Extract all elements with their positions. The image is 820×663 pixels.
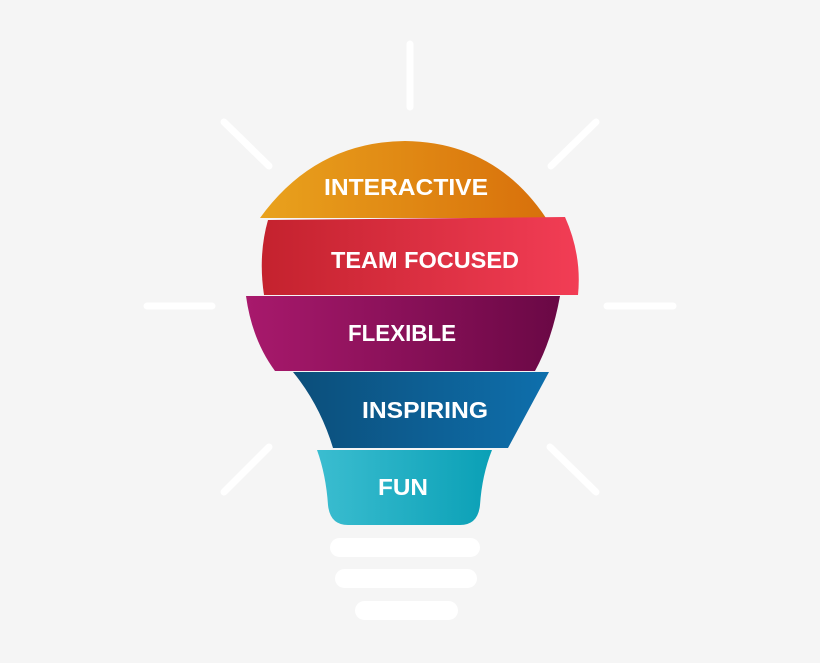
band: fun xyxy=(317,450,492,525)
bulb base bars xyxy=(330,538,480,620)
band: inspiring: INSPIRING xyxy=(362,397,488,423)
band: inspiring xyxy=(293,372,549,448)
band: flexible: FLEXIBLE xyxy=(348,320,456,346)
band: team focused: TEAM FOCUSED xyxy=(331,247,519,273)
band: interactive: INTERACTIVE xyxy=(324,174,488,200)
light rays xyxy=(147,44,673,492)
band: team focused xyxy=(262,217,579,295)
band: interactive xyxy=(260,141,546,218)
band: fun: FUN xyxy=(378,474,428,500)
band: flexible xyxy=(246,296,560,371)
